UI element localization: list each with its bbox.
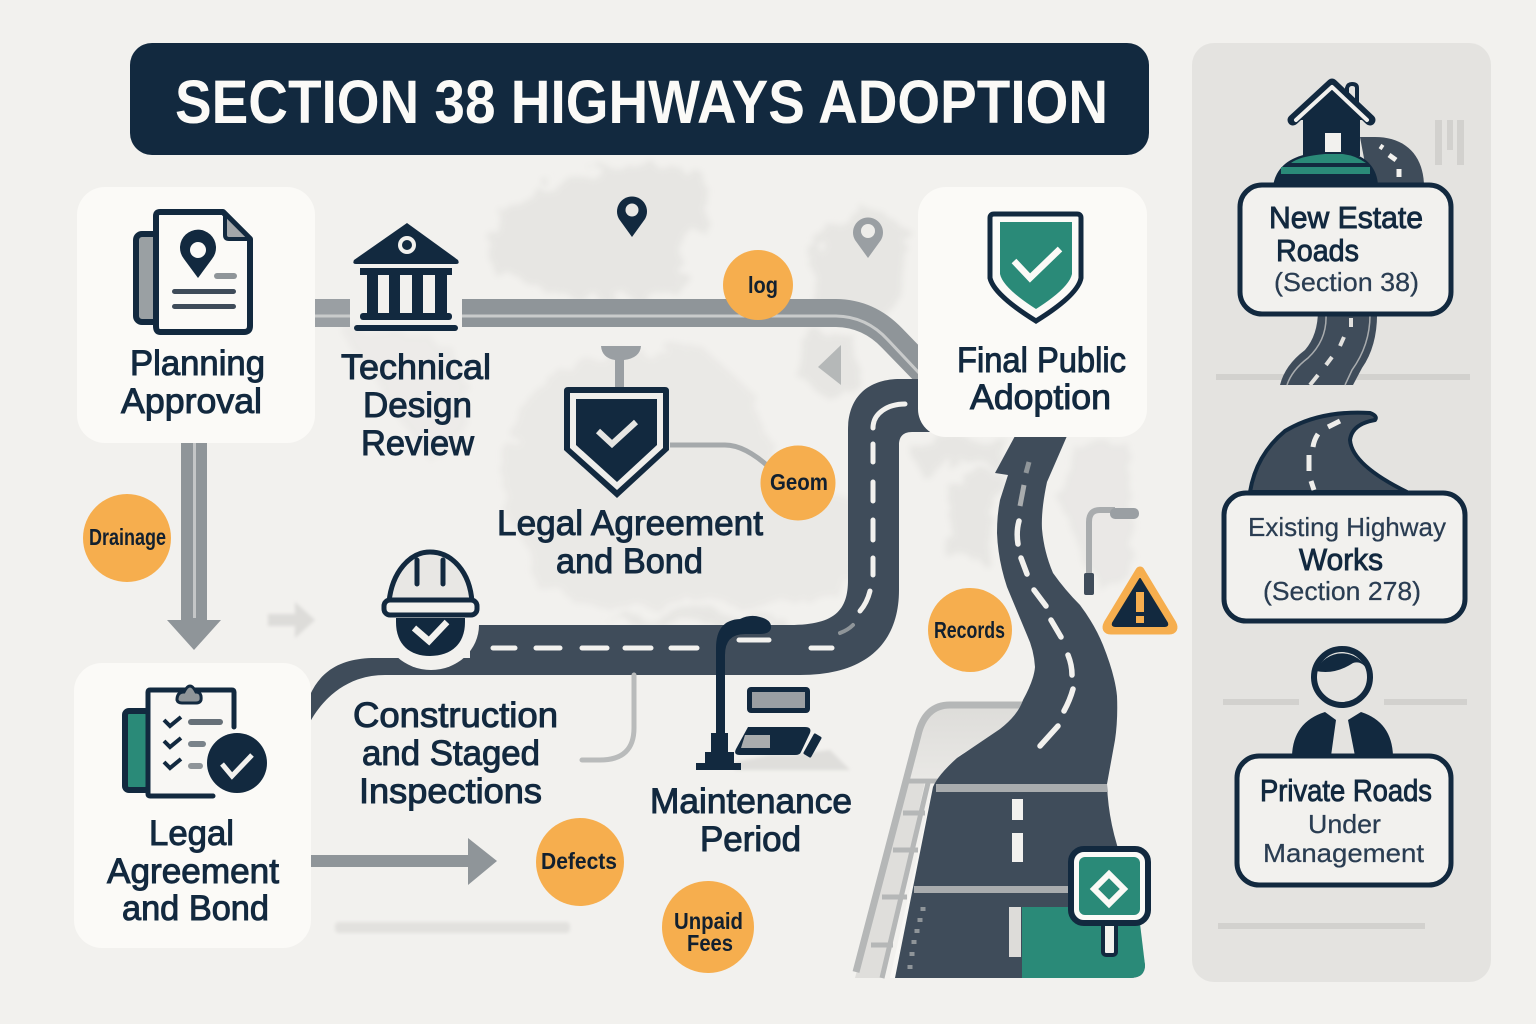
step label: legal agreement and bond — [497, 504, 763, 581]
sign: existing highway works: (Section 278) — [1263, 576, 1421, 606]
step label: construction and staged inspections: Construction — [353, 696, 558, 735]
title banner: SECTION 38 HIGHWAYS ADOPTION — [175, 68, 1108, 136]
badge: records: Records — [934, 617, 1005, 643]
sign: existing highway works — [1224, 493, 1465, 621]
badge: defects — [536, 818, 624, 906]
badge: geom — [760, 446, 836, 520]
card label: Legal — [149, 814, 234, 853]
step label: construction and staged inspections: Inspections — [359, 772, 542, 811]
separator — [1216, 374, 1470, 380]
horizontal arrow: legal to defects — [311, 838, 497, 885]
badge: drainage: Drainage — [89, 524, 166, 550]
badge: unpaid fees: Unpaid — [674, 908, 743, 934]
icon: house on mound — [1273, 84, 1378, 187]
card label: Agreement — [107, 852, 279, 891]
step label: construction and staged inspections — [353, 696, 558, 811]
winding road: construction to adoption — [310, 379, 930, 722]
card label — [107, 814, 279, 928]
sign: new estate roads: New Estate — [1269, 200, 1423, 235]
kerb ladder edging — [855, 705, 1030, 978]
icon: road sign — [1071, 849, 1148, 955]
icon: adopted shield — [990, 214, 1081, 321]
card label — [957, 341, 1126, 417]
sign: new estate roads — [1240, 185, 1451, 314]
card label: Approval — [121, 382, 262, 421]
card: final public adoption — [918, 187, 1147, 437]
thin connector line — [582, 675, 634, 760]
sign: new estate roads: Roads — [1276, 233, 1359, 268]
icon: hard hat inspector — [383, 552, 479, 670]
icon: courthouse — [353, 223, 459, 331]
step label: construction and staged inspections: and Staged — [362, 734, 540, 773]
panel: road categories — [1192, 43, 1491, 982]
sign: private roads under management: Management — [1263, 838, 1425, 868]
icon: road behind house — [1360, 137, 1424, 190]
icon: curved road — [1250, 413, 1407, 492]
grey connector: planning to final adoption — [314, 299, 925, 374]
icon: warning triangle — [1107, 571, 1173, 630]
badge: log — [723, 250, 793, 320]
icon: street lamp and equipment — [696, 616, 820, 770]
sign: private roads under management: Private Roads — [1260, 773, 1432, 808]
sign: private roads under management: Under — [1308, 809, 1381, 839]
road below new estate sign — [1280, 310, 1377, 385]
step label: technical design review: Review — [361, 424, 475, 463]
card: planning approval — [77, 187, 315, 443]
decorative grey bars — [1435, 120, 1464, 165]
step label: maintenance period — [650, 782, 852, 859]
sign: new estate roads: (Section 38) — [1274, 267, 1419, 297]
step label: technical design review: Technical — [341, 348, 491, 387]
badge: geom: Geom — [770, 469, 828, 495]
sign: existing highway works: Works — [1299, 542, 1383, 577]
faint map background — [345, 165, 1135, 625]
step label: legal agreement and bond: Legal Agreement — [497, 504, 763, 543]
badge: defects: Defects — [541, 848, 617, 874]
icon: grey street lamp — [1084, 508, 1139, 595]
card label — [121, 344, 265, 421]
divider bars around person — [1223, 699, 1467, 705]
step label: maintenance period: Maintenance — [650, 782, 852, 821]
card label: Adoption — [970, 378, 1111, 417]
card label: and Bond — [122, 889, 269, 928]
step label: legal agreement and bond: and Bond — [556, 542, 703, 581]
sign: existing highway works: Existing Highway — [1248, 512, 1446, 542]
step label: technical design review: Design — [363, 386, 472, 425]
main road to adoption — [895, 436, 1145, 978]
icon: map pin grey — [853, 218, 883, 258]
badge: log: log — [748, 272, 778, 298]
icon: checklist clipboard — [125, 686, 267, 796]
badge: unpaid fees — [662, 881, 754, 973]
connector: shield stem — [601, 346, 641, 388]
step label: maintenance period: Period — [700, 820, 801, 859]
connector: shield to geom — [670, 445, 770, 468]
sign: private roads under management — [1237, 756, 1451, 885]
card label: Final Public — [957, 341, 1126, 380]
bottom divider — [1218, 923, 1425, 929]
vertical arrow: planning to legal — [167, 443, 221, 650]
step label: technical design review — [341, 348, 491, 463]
title banner — [130, 43, 1149, 155]
icon: person manager — [1292, 649, 1393, 756]
badge: records — [928, 588, 1012, 672]
badge: unpaid fees: Fees — [687, 930, 733, 956]
card label: Planning — [130, 344, 265, 383]
faint arrow — [268, 602, 315, 638]
shadow under maintenance icon — [735, 750, 850, 770]
icon: planning document — [136, 212, 250, 332]
road centre dashes — [1309, 421, 1340, 490]
icon: faint direction arrow — [818, 345, 841, 385]
badge: drainage — [83, 494, 171, 582]
faint ground shadow — [335, 922, 570, 933]
icon: legal shield — [564, 387, 669, 498]
card: legal agreement — [74, 663, 311, 948]
icon: map pin dark — [617, 197, 647, 237]
